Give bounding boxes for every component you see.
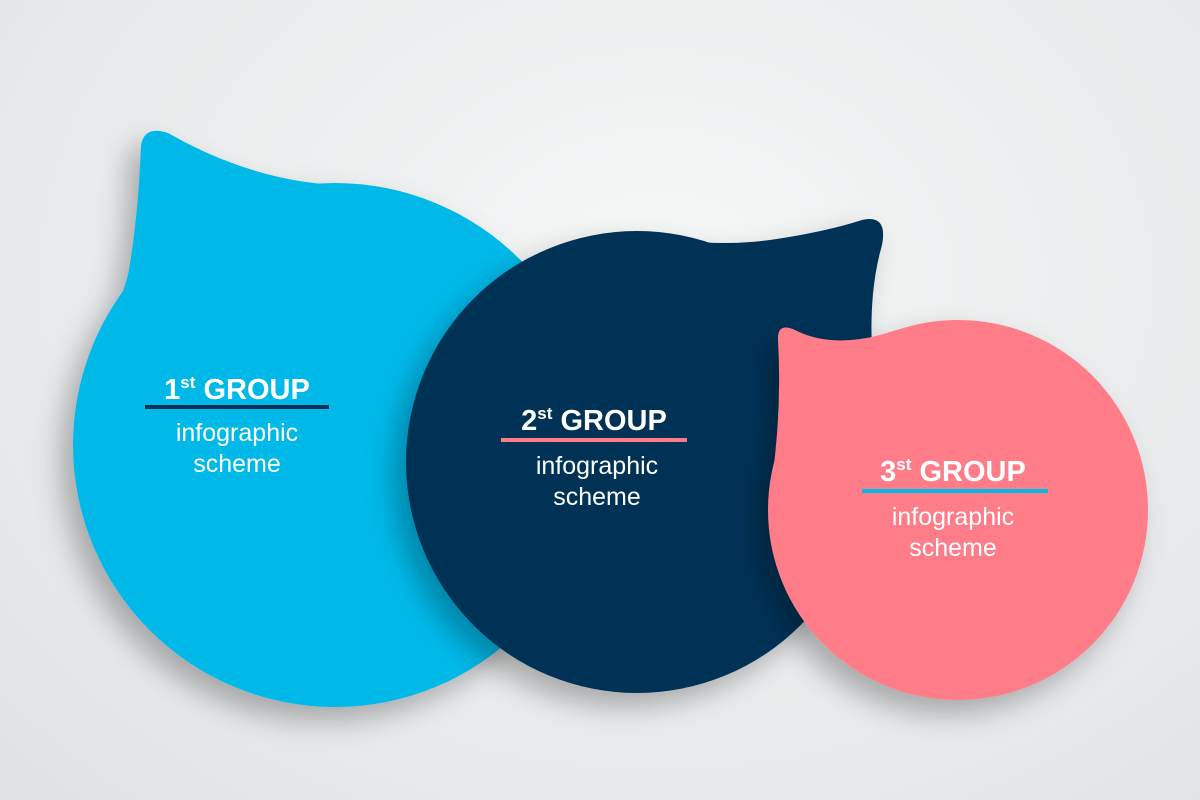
- text: group 3: st: [896, 455, 912, 474]
- text: group 2: st: [537, 404, 553, 423]
- text: group 1: st: [180, 373, 196, 392]
- text: group 3: [862, 455, 1048, 562]
- text: group 3: 3: [880, 456, 896, 488]
- text: group 2: GROUP: [552, 405, 667, 437]
- text: group 1: GROUP: [195, 374, 310, 406]
- text: group 3: infographic: [892, 503, 1014, 531]
- text: group 2: [501, 404, 687, 511]
- text: group 1: infographic: [176, 419, 298, 447]
- panel: group 2 navy drop: [406, 219, 883, 693]
- text: group 1: scheme: [193, 450, 281, 478]
- text: group 1: [145, 373, 329, 478]
- text: group 3: scheme: [909, 534, 997, 562]
- text: group 3: GROUP: [911, 456, 1026, 488]
- text: group 1: 1: [164, 374, 180, 406]
- text: group 2: scheme: [553, 483, 641, 511]
- text: group 2: 2: [521, 405, 537, 437]
- text: group 2: infographic: [536, 452, 658, 480]
- panel: group 1 blue drop: [73, 131, 597, 707]
- panel: group 3 pink drop: [768, 320, 1148, 700]
